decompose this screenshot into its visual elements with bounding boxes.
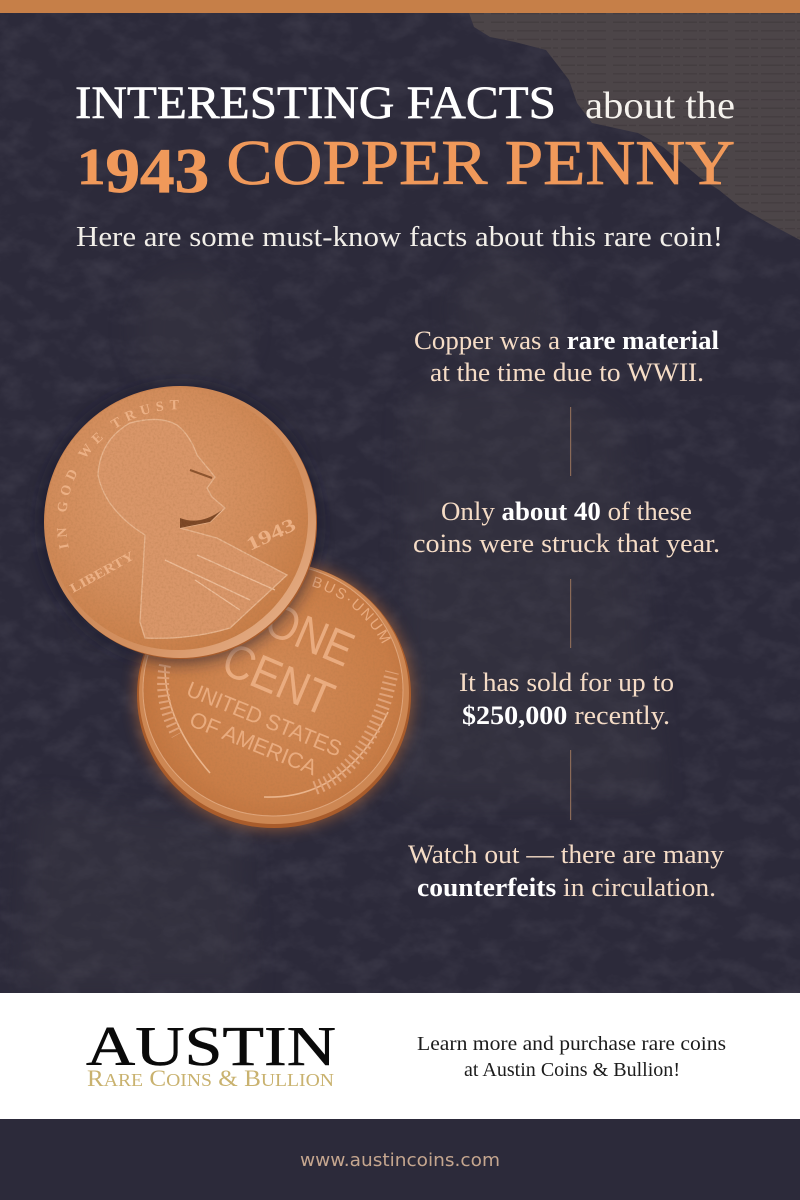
fact 4: Watch out — there are many xyxy=(408,840,724,869)
coins illustration xyxy=(40,383,422,838)
coin lettering: UNITED STATES xyxy=(183,676,345,761)
coin lettering: OF AMERICA xyxy=(186,706,321,780)
logo: AUSTIN xyxy=(86,1016,336,1078)
facts list xyxy=(408,326,724,902)
fact 1: at the time due to WWII. xyxy=(430,358,704,387)
divider 2 xyxy=(570,579,571,648)
Lincoln portrait xyxy=(98,419,287,638)
fact 1: Copper was a rare material xyxy=(414,326,719,355)
fact 2: Only about 40 of these xyxy=(441,497,692,526)
fact 4: counterfeits in circulation. xyxy=(417,873,716,902)
coin lettering: ONE xyxy=(258,593,361,677)
title line 2: COPPER PENNY xyxy=(209,128,735,198)
title line 2: 1 xyxy=(77,139,106,196)
white logo band xyxy=(0,993,800,1119)
torn newspaper corner xyxy=(469,13,800,240)
motto and date xyxy=(57,400,299,596)
logo: RARE COINS & BULLION xyxy=(87,1066,334,1091)
call to action xyxy=(417,1033,726,1081)
subtitle: Here are some must-know facts about this rare coin! xyxy=(76,221,723,253)
fact 2: coins were struck that year. xyxy=(413,529,720,558)
title xyxy=(75,77,735,206)
faded photo figures xyxy=(20,255,660,990)
call to action: Learn more and purchase rare coins xyxy=(417,1033,726,1055)
top accent bar xyxy=(0,0,800,13)
coin: obverse Lincoln xyxy=(40,383,322,674)
fact 3 xyxy=(459,668,674,730)
title line 2: 943 xyxy=(106,136,209,206)
fact 4 xyxy=(408,840,724,902)
wheat ears xyxy=(163,665,392,797)
call to action: at Austin Coins & Bullion! xyxy=(464,1059,680,1081)
coin: reverse one cent xyxy=(126,558,422,838)
fact 1 xyxy=(414,326,719,387)
fact 3: It has sold for up to xyxy=(459,668,674,697)
website url: www.austincoins.com xyxy=(300,1150,500,1171)
fact 3: $250,000 recently. xyxy=(462,701,670,730)
footer xyxy=(0,1119,800,1200)
coin lettering: BUS·UNUM xyxy=(312,576,391,644)
fact 2 xyxy=(413,497,720,558)
coin lettering xyxy=(183,576,391,780)
motto and date: 1943 xyxy=(243,515,299,556)
divider 1 xyxy=(570,407,571,476)
divider 3 xyxy=(570,750,571,820)
title line 1: INTERESTING FACTS xyxy=(75,77,556,129)
motto and date: IN GOD WE TRUST xyxy=(57,400,179,550)
title line 1 suffix: about the xyxy=(585,85,735,127)
coin lettering: CENT xyxy=(215,633,341,727)
motto and date: LIBERTY xyxy=(67,548,137,596)
logo xyxy=(86,1016,336,1091)
